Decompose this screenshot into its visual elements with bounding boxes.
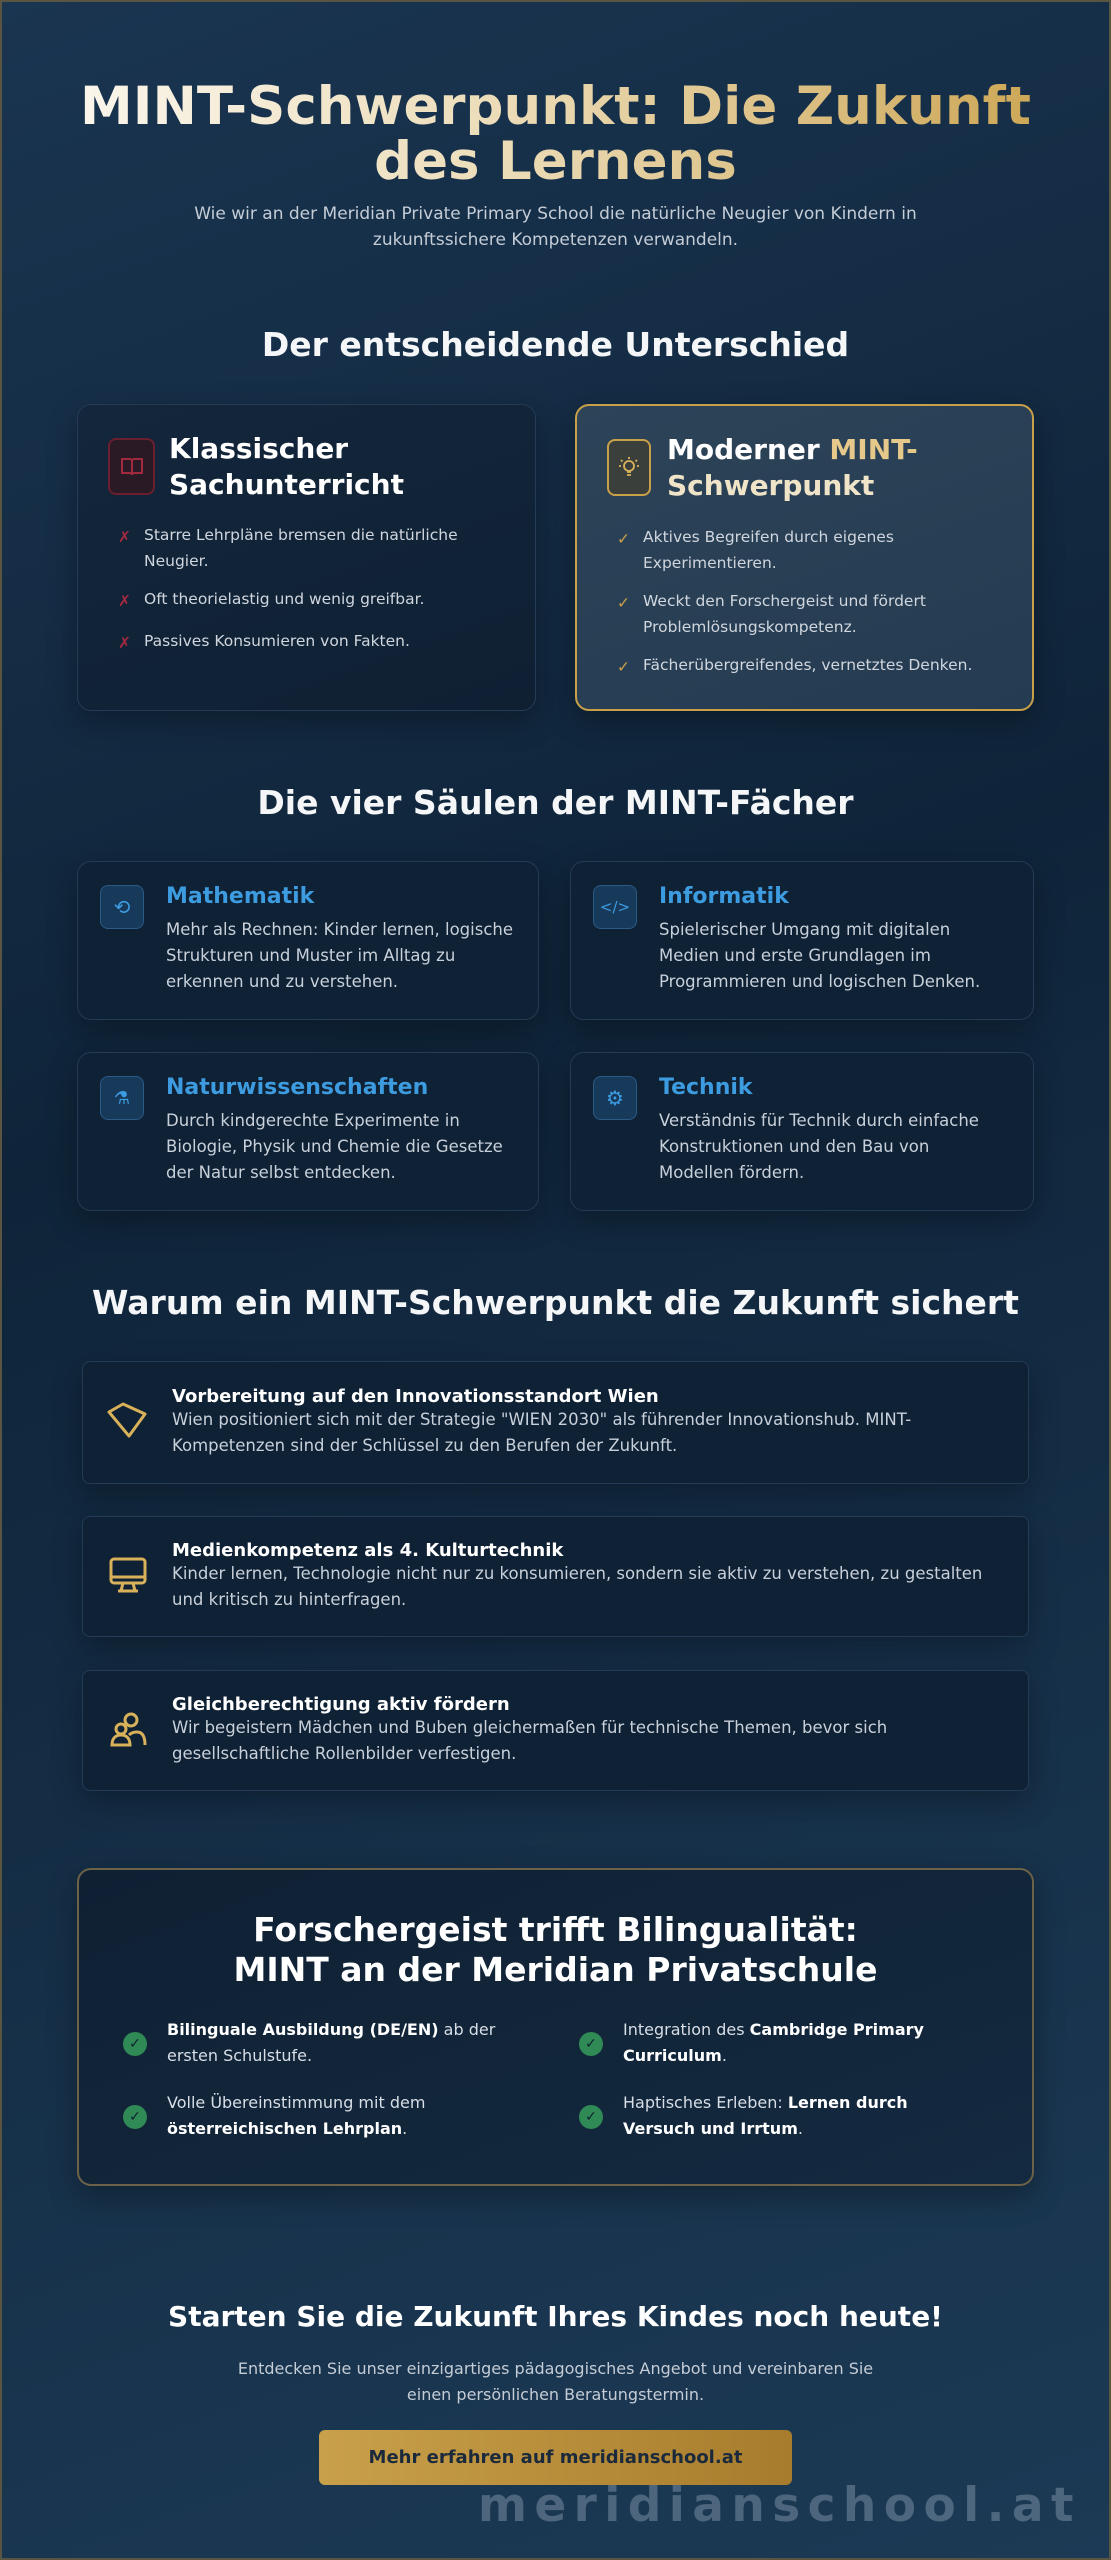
text [659, 884, 980, 991]
item 2: ✓ [585, 2036, 597, 2052]
title: MINT-Schwerpunkt: Die Zukunft [80, 76, 1031, 137]
bullets [617, 528, 972, 676]
text: Gleichberechtigung aktiv fördern [172, 1694, 510, 1715]
reason 1 [82, 1361, 1029, 1484]
text: Informatik [659, 884, 789, 909]
card heading [667, 433, 918, 502]
text: Medienkompetenz als 4. Kulturtechnik [172, 1540, 563, 1561]
text: Wir begeistern Mädchen und Buben gleichermaßen für technische Themen, bevor sich gesellschaftliche Rollenbilder verfestigen. [172, 1718, 887, 1763]
reason 3 [82, 1670, 1029, 1791]
button: Mehr erfahren auf meridianschool.at [369, 2447, 742, 2468]
text: Verständnis für Technik durch einfache Konstruktionen und den Bau von Modellen fördern. [659, 1111, 979, 1182]
icon: flask: ⚗ [114, 1088, 130, 1108]
text: Vorbereitung auf den Innovationsstandort Wien [172, 1386, 659, 1407]
text [166, 1075, 503, 1182]
bullets: ✓ [617, 658, 630, 676]
text [659, 1075, 979, 1182]
bullets: Passives Konsumieren von Fakten. [144, 632, 410, 650]
text: Durch kindgerechte Experimente in Biologie, Physik und Chemie die Gesetze der Natur selbst entdecken. [166, 1111, 503, 1182]
text [172, 1386, 911, 1455]
icon: monitor [110, 1558, 146, 1592]
bullets: ✗ [118, 528, 131, 546]
item 3: Volle Übereinstimmung mit dem österreichischen Lehrplan. [167, 2093, 425, 2138]
card heading: Moderner MINT- [667, 433, 918, 466]
text: Technik [659, 1075, 753, 1100]
pillar: Informatik [570, 861, 1034, 1020]
heading: vier Säulen: Die vier Säulen der MINT-Fächer [257, 783, 854, 822]
button [319, 2430, 792, 2485]
icon: people [110, 1712, 146, 1746]
panel: modern [575, 404, 1034, 711]
CTA heading: Starten Sie die Zukunft Ihres Kindes noch heute! [168, 2300, 943, 2333]
panel: classic [77, 404, 536, 711]
title [80, 76, 1031, 192]
icon: gear: ⚙ [606, 1086, 624, 1110]
bullets: Aktives Begreifen durch eigenes Experimentieren. [643, 528, 894, 572]
text: Spielerischer Umgang mit digitalen Medien und erste Grundlagen im Programmieren und logischen Denken. [659, 920, 980, 991]
card heading: Sachunterricht [169, 468, 404, 501]
text [172, 1694, 887, 1763]
bullets: ✓ [617, 594, 630, 612]
icon: code: </> [600, 898, 630, 916]
pillar: Mathematik [77, 861, 539, 1020]
item 1: Bilinguale Ausbildung (DE/EN) ab der ersten Schulstufe. [167, 2020, 495, 2065]
CTA text: Entdecken Sie unser einzigartiges pädagogisches Angebot und vereinbaren Sie einen persönlichen Beratungstermin. [238, 2359, 873, 2404]
icon: flask [100, 1076, 144, 1120]
bullets: ✗ [118, 592, 131, 610]
icon: gear [593, 1076, 637, 1120]
heading: Der entscheidende Unterschied: Der entscheidende Unterschied [262, 325, 849, 364]
text [166, 884, 513, 991]
item 4: Haptisches Erleben: Lernen durch Versuch und Irrtum. [623, 2093, 908, 2138]
icon: code [593, 885, 637, 929]
heading: MINT an der Meridian Privatschule [234, 1950, 877, 1989]
pillar: Naturwissenschaften [77, 1052, 539, 1211]
title: des Lernens [374, 131, 737, 192]
icon: math [100, 885, 144, 929]
bullets: Weckt den Forschergeist und fördert Problemlösungskompetenz. [643, 592, 926, 636]
bullets: Fächerübergreifendes, vernetztes Denken. [643, 656, 972, 674]
item 2: Integration des Cambridge Primary Curriculum. [623, 2020, 924, 2065]
icon: math: ⟲ [114, 895, 130, 919]
text: Wien positioniert sich mit der Strategie "WIEN 2030" als führender Innovationshub. MINT-Kompetenzen sind der Schlüssel zu den Berufen der Zukunft. [172, 1410, 911, 1455]
panel: Bilingualität [77, 1868, 1034, 2186]
icon: bulb [607, 439, 651, 496]
card heading: Schwerpunkt [667, 469, 874, 502]
item 4: ✓ [585, 2109, 597, 2125]
bullets: Starre Lehrpläne bremsen die natürliche Neugier. [144, 526, 458, 570]
icon: diamond [107, 1402, 146, 1438]
bullets [118, 526, 458, 652]
heading [234, 1910, 877, 1989]
text: Kinder lernen, Technologie nicht nur zu konsumieren, sondern sie aktiv zu verstehen, zu gestalten und kritisch zu hinterfragen. [172, 1564, 982, 1609]
card heading: Klassischer [169, 432, 348, 465]
watermark: meridianschool.at [478, 2478, 1081, 2533]
subtitle: Wie wir an der Meridian Private Primary School die natürliche Neugier von Kindern in zukunftssichere Kompetenzen verwandeln. [194, 204, 917, 250]
heading: Warum: Warum ein MINT-Schwerpunkt die Zukunft sichert [92, 1283, 1019, 1322]
card heading [169, 432, 404, 501]
text: Mehr als Rechnen: Kinder lernen, logische Strukturen und Muster im Alltag zu erkennen und zu verstehen. [166, 920, 513, 991]
item 3: ✓ [129, 2109, 141, 2125]
bullets: Oft theorielastig und wenig greifbar. [144, 590, 424, 608]
reason 2 [82, 1516, 1029, 1637]
text [172, 1540, 982, 1609]
text: Mathematik [166, 884, 314, 909]
icon: book [108, 438, 155, 495]
bullets: ✗ [118, 634, 131, 652]
text: Naturwissenschaften [166, 1075, 428, 1100]
pillar: Technik [570, 1052, 1034, 1211]
bullets: ✓ [617, 530, 630, 548]
item 1: ✓ [129, 2036, 141, 2052]
heading: Forschergeist trifft Bilingualität: [253, 1910, 858, 1949]
